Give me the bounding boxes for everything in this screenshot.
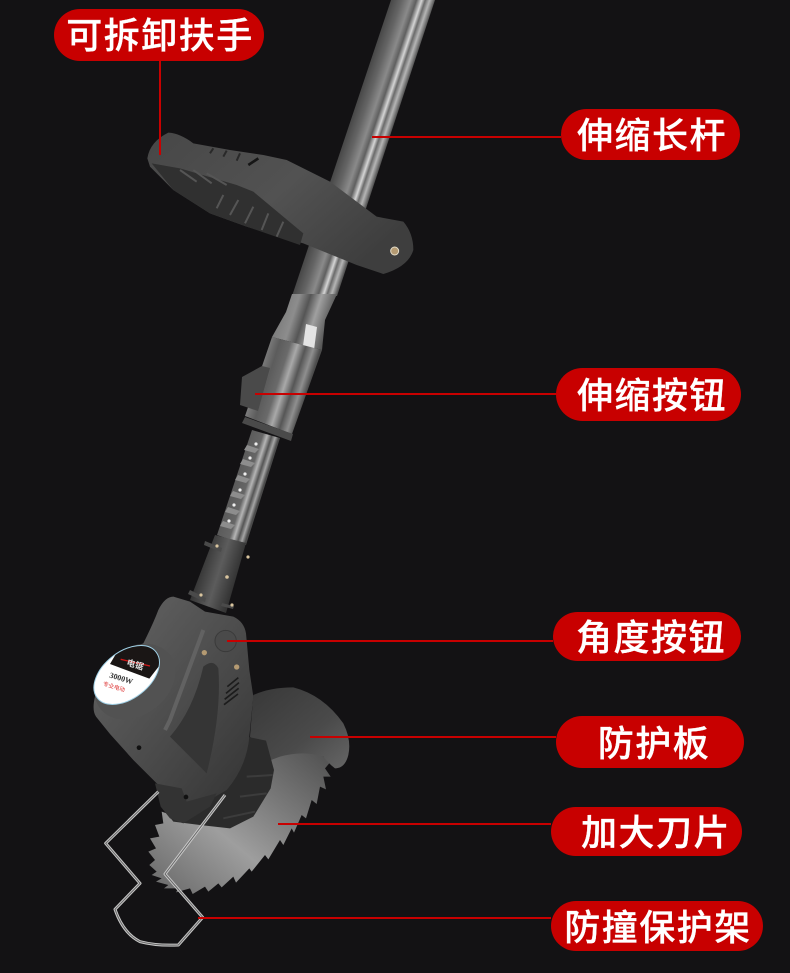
rivets bbox=[202, 650, 207, 655]
label: angle button: 角度按钮 bbox=[576, 617, 726, 658]
detachable handle bbox=[147, 133, 413, 274]
telescopic collar bbox=[242, 337, 322, 441]
label: enlarged blade: 加大刀片 bbox=[581, 812, 731, 853]
label: telescopic button bbox=[556, 368, 741, 421]
telescopic pole bbox=[272, 0, 435, 350]
grip opening bbox=[170, 663, 219, 773]
grip inner bbox=[152, 163, 303, 245]
label: detachable handle: 可拆卸扶手 bbox=[66, 15, 254, 56]
blade guard bbox=[250, 687, 349, 768]
motor head bbox=[80, 597, 274, 828]
pole taper bbox=[272, 294, 337, 350]
label: anti-collision frame: 防撞保护架 bbox=[564, 907, 752, 948]
label: telescopic pole: 伸缩长杆 bbox=[577, 115, 727, 156]
grip highlight band bbox=[165, 630, 203, 730]
angle knob bbox=[215, 630, 236, 652]
lower shaft with adjustment slots bbox=[217, 430, 280, 545]
telescopic button bbox=[240, 366, 270, 411]
main housing bbox=[94, 597, 253, 802]
product label: 专业电动 bbox=[102, 680, 126, 694]
product label: 3000W bbox=[108, 671, 134, 686]
label: guard plate: 防护板 bbox=[598, 723, 710, 764]
label: guard plate bbox=[556, 716, 744, 768]
motor cap bbox=[80, 628, 190, 735]
handle pin bbox=[391, 247, 399, 255]
angle bracket bbox=[188, 535, 250, 613]
label: enlarged blade bbox=[551, 807, 742, 856]
leader lines bbox=[160, 60, 561, 918]
gear housing rings bbox=[162, 737, 274, 828]
top ridges bbox=[210, 148, 240, 161]
label: telescopic pole bbox=[561, 109, 740, 160]
product label: 电锯 bbox=[125, 656, 146, 672]
label: telescopic button: 伸缩按钮 bbox=[577, 375, 727, 416]
label: angle button bbox=[553, 612, 741, 661]
bottom foot bbox=[155, 783, 217, 823]
safety wire frame bbox=[106, 792, 225, 945]
product label bbox=[93, 645, 160, 705]
saw blade bbox=[148, 743, 331, 894]
vent slots bbox=[224, 678, 239, 705]
